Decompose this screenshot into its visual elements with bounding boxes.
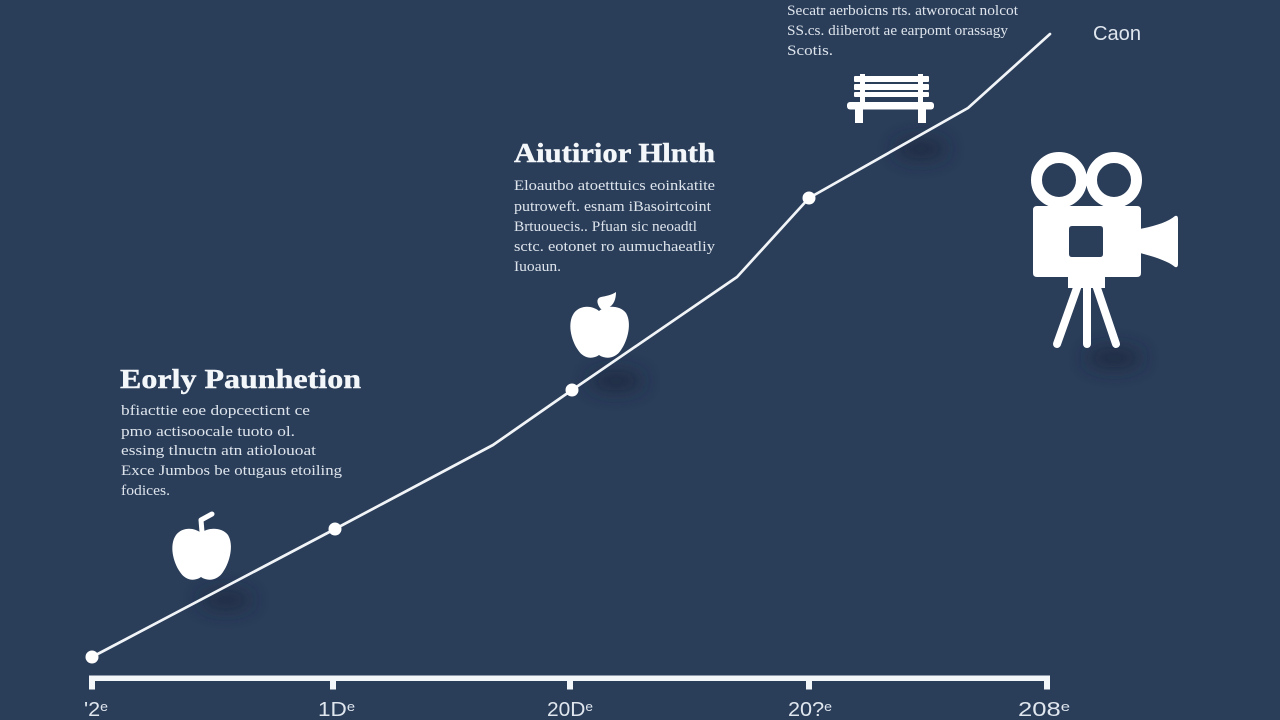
body: middle: sctc. eotonet ro aumuchaeatliy [514, 239, 716, 255]
icon: bench [847, 74, 934, 123]
body: middle [514, 178, 716, 275]
body: early: bfiacttie eoe dopcecticnt ce [121, 403, 310, 419]
icon: apple 1 [172, 514, 231, 580]
body: middle: Eloautbo atoetttuics eoinkatite [514, 178, 715, 194]
heading: early: Eorly Paunhetion [120, 364, 361, 394]
text block: top milestone: SS.cs. diiberott ae earpomt orassagy [787, 23, 1009, 39]
axis labels: e [585, 699, 593, 714]
icon shadows [200, 139, 1142, 609]
body: early: essing tlnuctn atn atiolouoat [121, 443, 316, 459]
heading: middle: Aiutirior Hlnth [514, 138, 715, 168]
body: early: Exce Jumbos be otugaus etoiling [121, 463, 342, 479]
body: middle: Brtuouecis.. Pfuan sic neoadtl [514, 219, 697, 235]
growth line with milestones [86, 34, 1050, 664]
axis labels: e [347, 699, 355, 714]
icon: film camera [1033, 158, 1178, 344]
body: early: fodices. [121, 483, 170, 499]
body: early [121, 403, 342, 499]
text block: middle milestone [514, 138, 716, 275]
text block: top milestone: Secatr aerboicns rts. atworocat nolcot [787, 3, 1018, 19]
caption: top right: Caon [1093, 23, 1141, 45]
text block: early milestone [120, 364, 361, 499]
timeline axis [89, 676, 1050, 690]
body: early: pmo actisoocale tuoto ol. [121, 424, 295, 440]
axis labels: e [100, 699, 108, 714]
text block: top milestone [787, 3, 1018, 59]
axis labels: e [1061, 699, 1070, 714]
body: middle: Iuoaun. [514, 259, 561, 275]
axis labels: e [824, 699, 832, 714]
axis labels [84, 699, 1070, 720]
text block: top milestone: Scotis. [787, 43, 833, 59]
body: middle: putroweft. esnam iBasoirtcoint [514, 199, 711, 215]
icon: apple 2 [570, 292, 629, 358]
